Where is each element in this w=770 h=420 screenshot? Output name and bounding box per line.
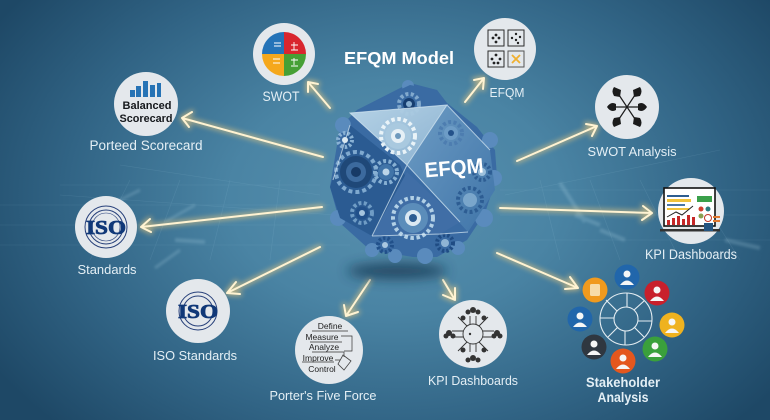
right face xyxy=(407,105,495,232)
icon: DMAIC steps: Measure xyxy=(305,332,339,342)
gear: top xyxy=(399,94,419,114)
arrow glow layer xyxy=(141,78,652,316)
node: SWOT Analysis xyxy=(588,75,677,159)
label: Analysis: Analysis xyxy=(598,390,648,405)
icon: SWOT quadrants xyxy=(253,23,315,85)
icon: DMAIC steps: Define xyxy=(318,321,343,331)
gear on top face xyxy=(381,119,415,153)
gear: lower right xyxy=(458,188,482,212)
crystal bumps xyxy=(330,80,502,264)
icon: Balanced Scorecard badge: Scorecard xyxy=(120,113,172,125)
node: SWOT xyxy=(253,23,315,104)
label: KPI Dashboards xyxy=(428,373,518,388)
label: crystal EFQM: EFQM xyxy=(424,154,485,183)
node: KPI Dashboards bottom xyxy=(428,300,518,388)
node: Balanced Scorecard xyxy=(90,72,202,153)
wheel diagram xyxy=(600,293,652,345)
label: KPI Dashboards xyxy=(645,247,737,262)
node: Standards xyxy=(75,196,137,277)
label: Stakeholder: Stakeholder xyxy=(586,375,661,390)
gear: small upper left xyxy=(338,133,352,147)
gear: bottom strip xyxy=(437,235,453,251)
icon: DMAIC steps: Control xyxy=(308,364,336,374)
gear: left small xyxy=(375,161,397,183)
top back face xyxy=(357,85,447,110)
icon: DMAIC steps: Analyze xyxy=(309,342,339,352)
icon: DMAIC steps xyxy=(295,316,363,384)
icon: ISO seal: ISO xyxy=(178,301,218,323)
node: KPI Dashboards right xyxy=(645,178,737,262)
left face xyxy=(330,125,407,236)
gear: right xyxy=(440,122,462,144)
top light face xyxy=(350,105,447,165)
gear: small bottom left xyxy=(378,238,392,252)
stakeholder avatars xyxy=(568,264,684,374)
node: Porter's Five Force xyxy=(270,316,376,403)
central shadow xyxy=(347,263,447,279)
node: ISO Standards xyxy=(153,279,237,363)
label: ISO Standards xyxy=(153,348,237,363)
central EFQM crystal xyxy=(330,80,502,264)
icon: ISO seal: ISO xyxy=(86,217,126,239)
icon: DMAIC steps: Improve xyxy=(303,353,334,363)
node: Stakeholder Analysis xyxy=(568,264,684,405)
crystal edges xyxy=(333,105,490,236)
bottom face xyxy=(372,172,460,236)
icon: six spades star xyxy=(595,75,659,139)
icon: laptop dashboard xyxy=(658,178,724,244)
gear: large left xyxy=(336,152,376,192)
label: Porter's Five Force xyxy=(270,388,376,403)
arrow core layer xyxy=(141,78,652,316)
node: EFQM xyxy=(474,18,536,100)
icon: Balanced Scorecard badge: Balanced xyxy=(122,100,172,112)
gear: far right xyxy=(474,164,490,180)
label: Standards xyxy=(78,262,137,277)
title: EFQM Model xyxy=(344,48,454,68)
icon: four square grid xyxy=(474,18,536,80)
label: SWOT xyxy=(262,88,300,104)
icon: people network xyxy=(439,300,507,368)
label: Porteed Scorecard xyxy=(90,138,202,153)
icon: Balanced Scorecard badge xyxy=(114,72,178,136)
crystal body xyxy=(330,83,497,257)
label: EFQM xyxy=(490,85,524,100)
label: SWOT Analysis xyxy=(588,144,677,159)
background light streaks xyxy=(110,183,760,268)
gear: bottom xyxy=(393,198,433,238)
arrows xyxy=(141,78,652,316)
background data grid xyxy=(0,150,770,260)
gear: lower left xyxy=(352,203,372,223)
